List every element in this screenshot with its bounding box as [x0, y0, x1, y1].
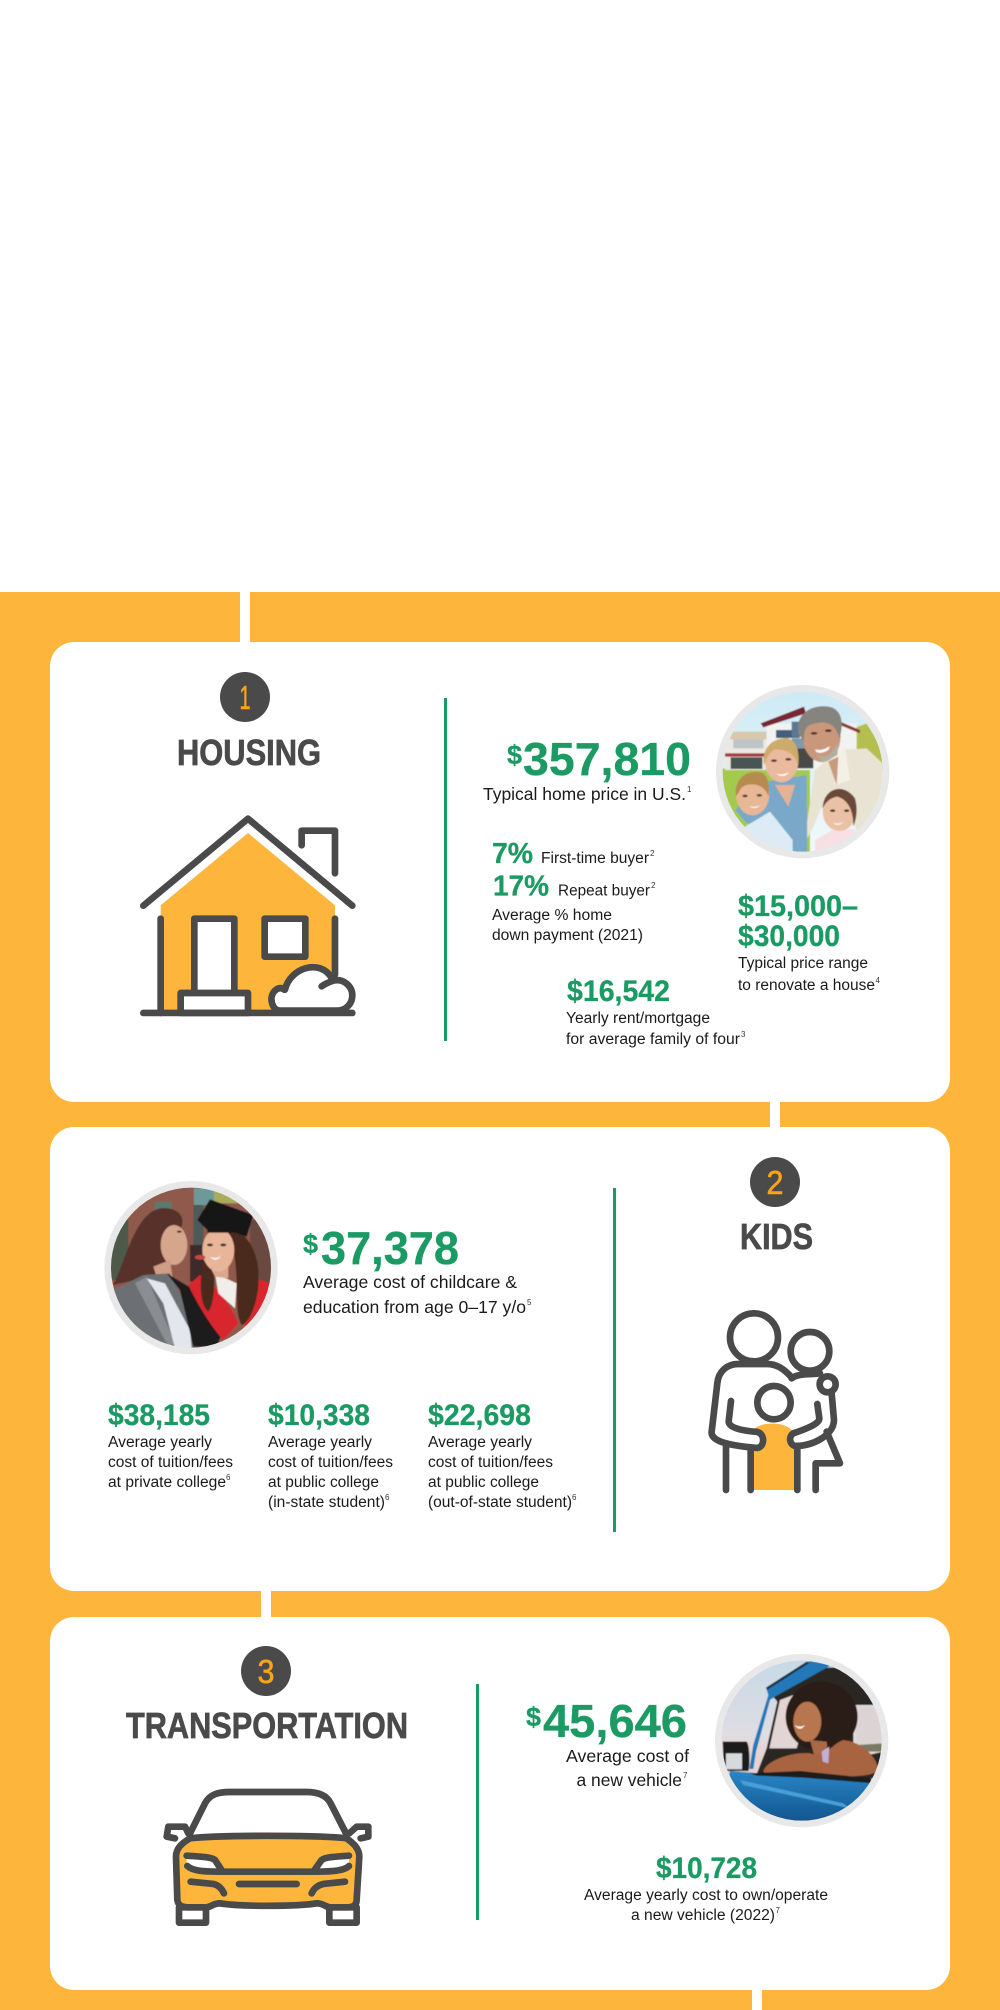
divider	[476, 1684, 479, 1920]
stat: public college out-of-state: $22,698	[428, 1399, 531, 1432]
stat: down payment: First-time buyer	[541, 850, 649, 867]
number badge 1: 1	[240, 679, 250, 716]
stat: down payment: 2	[650, 849, 655, 858]
stat: public college out-of-state: Average yearly	[428, 1434, 532, 1451]
stat: childcare and education	[303, 1222, 532, 1317]
stat: renovation price range: 4	[876, 976, 880, 985]
stat: public college out-of-state: (out-of-state student)	[428, 1494, 572, 1511]
stat: new vehicle cost: Average cost of	[566, 1746, 689, 1766]
stat: down payment: Repeat buyer	[558, 882, 650, 900]
stat: private college	[108, 1399, 233, 1491]
stat: public college out-of-state: 6	[572, 1493, 577, 1502]
stat: down payment: down payment (2021)	[492, 927, 643, 944]
stat: childcare and education: Average cost of childcare &	[303, 1272, 517, 1292]
number badge 3	[241, 1646, 291, 1696]
stat: public college out-of-state	[428, 1399, 577, 1511]
heading: transportation: TRANSPORTATION	[126, 1705, 408, 1746]
stat: public college in-state: Average yearly	[268, 1434, 372, 1451]
stat: childcare and education: 5	[527, 1298, 532, 1307]
stat: public college in-state: at public college	[268, 1474, 379, 1491]
stat: childcare and education: $	[303, 1229, 318, 1259]
connector: top	[240, 592, 250, 642]
stat: yearly rent: Yearly rent/mortgage	[566, 1010, 710, 1027]
stat: public college in-state: (in-state student)	[268, 1494, 385, 1511]
stat: typical home price: $	[507, 740, 522, 770]
number badge 2: 2	[766, 1164, 784, 1201]
stat: down payment: Average % home	[492, 907, 612, 924]
number badge 2	[750, 1157, 800, 1207]
stat: childcare and education: 37,378	[321, 1222, 459, 1274]
stat: typical home price: 357,810	[523, 733, 691, 785]
stat: public college in-state: 6	[385, 1493, 390, 1502]
icon: house	[143, 819, 352, 1013]
stat: down payment: 7%	[492, 838, 533, 870]
number badge 1	[220, 672, 270, 722]
stat: public college out-of-state: at public college	[428, 1474, 539, 1491]
photo: woman in blue car	[715, 1654, 888, 1827]
icon: family	[712, 1313, 840, 1490]
stat: yearly cost to own	[584, 1852, 828, 1924]
stat: yearly cost to own: $10,728	[656, 1852, 757, 1885]
stat: new vehicle cost: 7	[683, 1771, 688, 1780]
panel: housing	[50, 642, 950, 1102]
stat: typical home price	[483, 733, 692, 804]
photo: family outside home	[716, 685, 889, 858]
stat: yearly cost to own: Average yearly cost to own/operate	[584, 1887, 828, 1904]
stat: yearly rent: for average family of four	[566, 1031, 740, 1048]
stat: private college: $38,185	[108, 1399, 210, 1432]
panel: transportation	[50, 1617, 950, 1990]
stat: down payment	[492, 838, 656, 944]
stat: renovation price range: to renovate a house	[738, 977, 875, 994]
heading: housing: HOUSING	[177, 732, 321, 773]
stat: new vehicle cost: a new vehicle	[576, 1770, 682, 1790]
stat: public college in-state: $10,338	[268, 1399, 370, 1432]
stat: new vehicle cost: 45,646	[543, 1695, 687, 1747]
stat: typical home price: Typical home price in U.S.	[483, 784, 686, 804]
stat: typical home price: 1	[687, 785, 692, 794]
stat: public college out-of-state: cost of tuition/fees	[428, 1454, 553, 1471]
number badge 3: 3	[258, 1653, 274, 1690]
stat: yearly rent	[566, 975, 746, 1048]
photo: mother and graduate	[104, 1181, 278, 1354]
connector: kids to transportation	[261, 1591, 271, 1617]
stat: public college in-state: cost of tuition/fees	[268, 1454, 393, 1471]
stat: private college: at private college	[108, 1474, 226, 1491]
stat: public college in-state	[268, 1399, 393, 1511]
stat: private college: cost of tuition/fees	[108, 1454, 233, 1471]
stat: yearly cost to own: 7	[776, 1906, 780, 1915]
connector: housing to kids	[770, 1101, 780, 1127]
stat: new vehicle cost	[526, 1695, 689, 1790]
stat: private college: Average yearly	[108, 1434, 212, 1451]
orange background	[0, 592, 1000, 2010]
stat: yearly rent: 3	[741, 1030, 746, 1039]
stat: private college: 6	[226, 1473, 231, 1482]
heading: kids: KIDS	[740, 1216, 813, 1257]
connector: bottom	[752, 1990, 762, 2010]
stat: yearly rent: $16,542	[567, 975, 670, 1008]
stat: renovation price range: $30,000	[738, 920, 840, 953]
stat: down payment: 17%	[493, 870, 549, 902]
divider	[613, 1188, 616, 1532]
stat: renovation price range	[738, 890, 880, 994]
panel: kids	[50, 1127, 950, 1591]
icon: car	[167, 1792, 368, 1923]
stat: childcare and education: education from age 0–17 y/o	[303, 1297, 526, 1317]
stat: yearly cost to own: a new vehicle (2022)	[631, 1907, 775, 1924]
divider	[444, 698, 447, 1041]
stat: renovation price range: Typical price range	[738, 955, 868, 972]
stat: renovation price range: $15,000–	[738, 890, 858, 923]
stat: new vehicle cost: $	[526, 1702, 541, 1732]
stat: down payment: 2	[651, 881, 656, 890]
